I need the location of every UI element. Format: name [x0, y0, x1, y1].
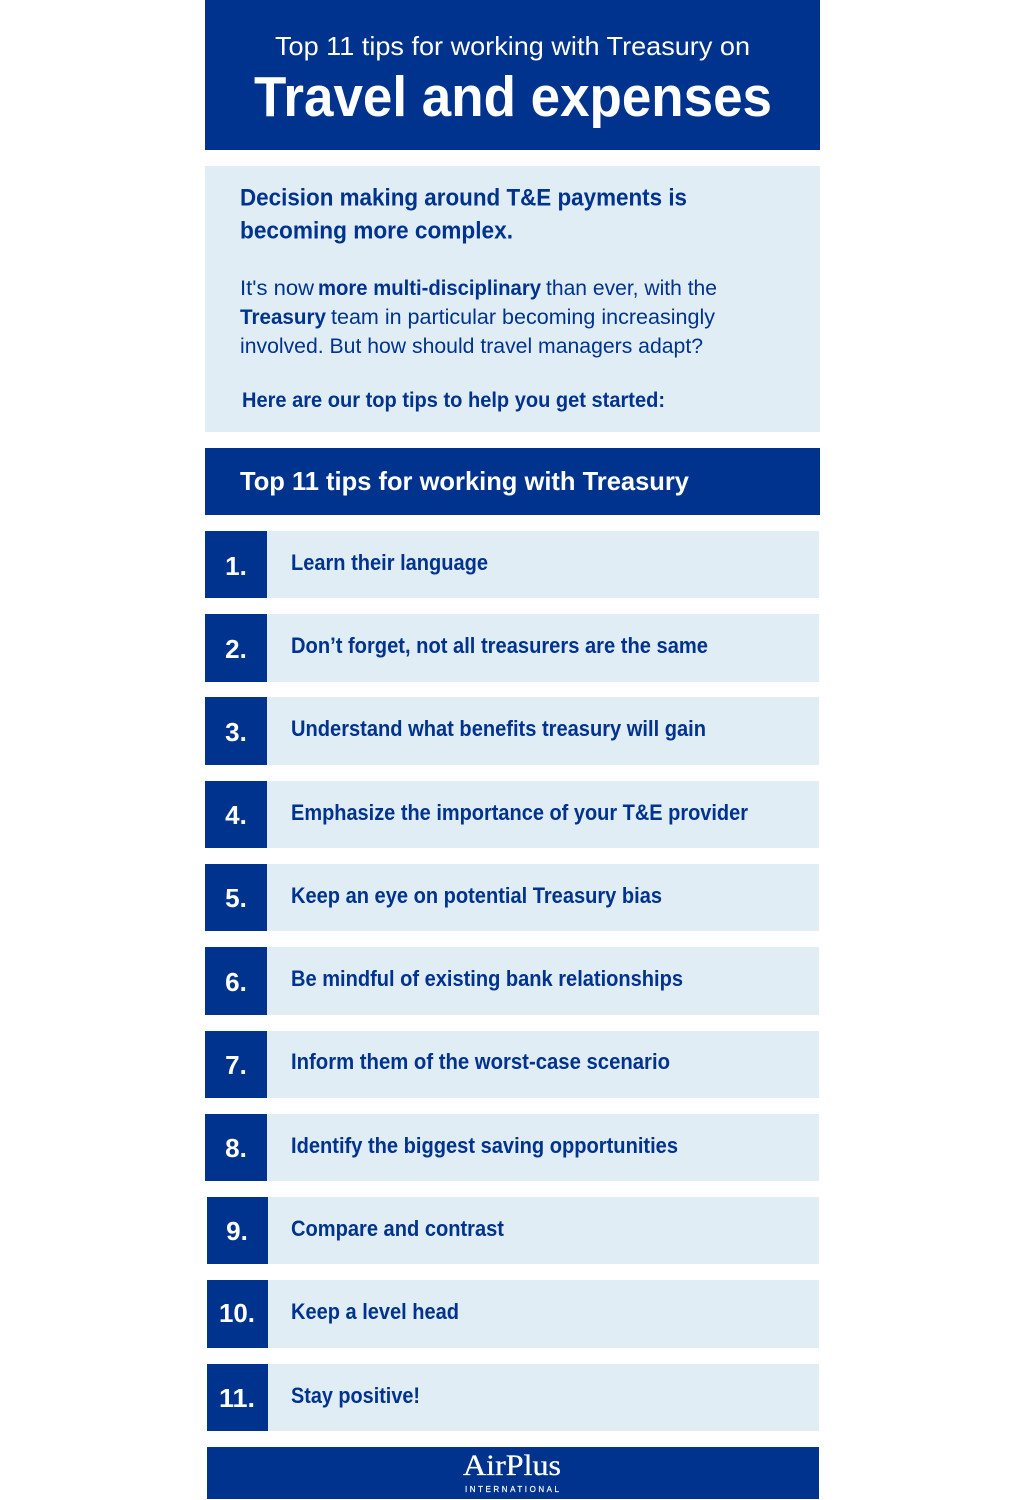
- tip 4: Emphasize the importance of your T&E provider: [291, 800, 748, 825]
- tip 2: Don’t forget, not all treasurers are the same: [291, 633, 708, 658]
- tip 6: 6.: [225, 967, 247, 997]
- tip 10: 10.: [219, 1298, 255, 1328]
- tip 4: 4.: [225, 800, 247, 830]
- tip 9: 9.: [226, 1216, 248, 1246]
- tip 11: 11.: [219, 1383, 255, 1413]
- section heading bar: [205, 448, 820, 515]
- tip 1: [205, 531, 819, 598]
- logo tagline: INTERNATIONAL: [465, 1485, 560, 1494]
- intro paragraph: It's now: [240, 277, 315, 300]
- intro paragraph: [240, 277, 717, 358]
- tip 6: Be mindful of existing bank relationships: [291, 966, 683, 991]
- section heading bar: Top 11 tips for working with Treasury: [240, 466, 690, 496]
- tip 5: [205, 864, 819, 931]
- intro call to action: Here are our top tips to help you get started:: [242, 389, 665, 412]
- footer bar with AirPlus logo: [207, 1447, 819, 1499]
- tip 11: Stay positive!: [291, 1383, 420, 1408]
- tip 5: Keep an eye on potential Treasury bias: [291, 883, 662, 908]
- tip 7: 7.: [225, 1050, 247, 1080]
- tip 5: 5.: [225, 883, 247, 913]
- header subtitle: Top 11 tips for working with Treasury on: [275, 31, 750, 61]
- tip 8: [205, 1114, 819, 1181]
- tip 2: 2.: [225, 634, 247, 664]
- tip 9: [207, 1197, 819, 1264]
- intro heading: [240, 184, 687, 244]
- tip 1: 1.: [225, 551, 247, 581]
- header banner: [205, 0, 820, 150]
- tip 10: [207, 1280, 819, 1348]
- logo wordmark: AirPlus: [463, 1449, 561, 1482]
- intro paragraph: Treasury: [240, 306, 326, 329]
- tip 10: Keep a level head: [291, 1299, 459, 1324]
- intro paragraph: team in particular becoming increasingly: [331, 306, 716, 329]
- intro heading: becoming more complex.: [240, 218, 513, 244]
- tip 6: [205, 947, 819, 1015]
- tip 3: [205, 697, 819, 765]
- intro paragraph: involved. But how should travel managers adapt?: [240, 335, 703, 358]
- intro paragraph: than ever, with the: [546, 277, 717, 300]
- panel: introduction: [205, 166, 820, 432]
- tip 1: Learn their language: [291, 550, 488, 575]
- main title: Travel and expenses: [254, 65, 772, 129]
- tip 8: 8.: [225, 1133, 247, 1163]
- tip 11: [207, 1364, 819, 1431]
- tip 3: Understand what benefits treasury will gain: [291, 716, 706, 741]
- intro heading: Decision making around T&E payments is: [240, 184, 687, 212]
- tip 7: Inform them of the worst-case scenario: [291, 1049, 670, 1074]
- tip 3: 3.: [225, 717, 247, 747]
- tip 9: Compare and contrast: [291, 1216, 505, 1241]
- tip 8: Identify the biggest saving opportunities: [291, 1133, 678, 1158]
- tip 7: [205, 1031, 819, 1098]
- intro paragraph: more multi-disciplinary: [318, 277, 541, 300]
- tip 2: [205, 614, 819, 682]
- tip 4: [205, 781, 819, 848]
